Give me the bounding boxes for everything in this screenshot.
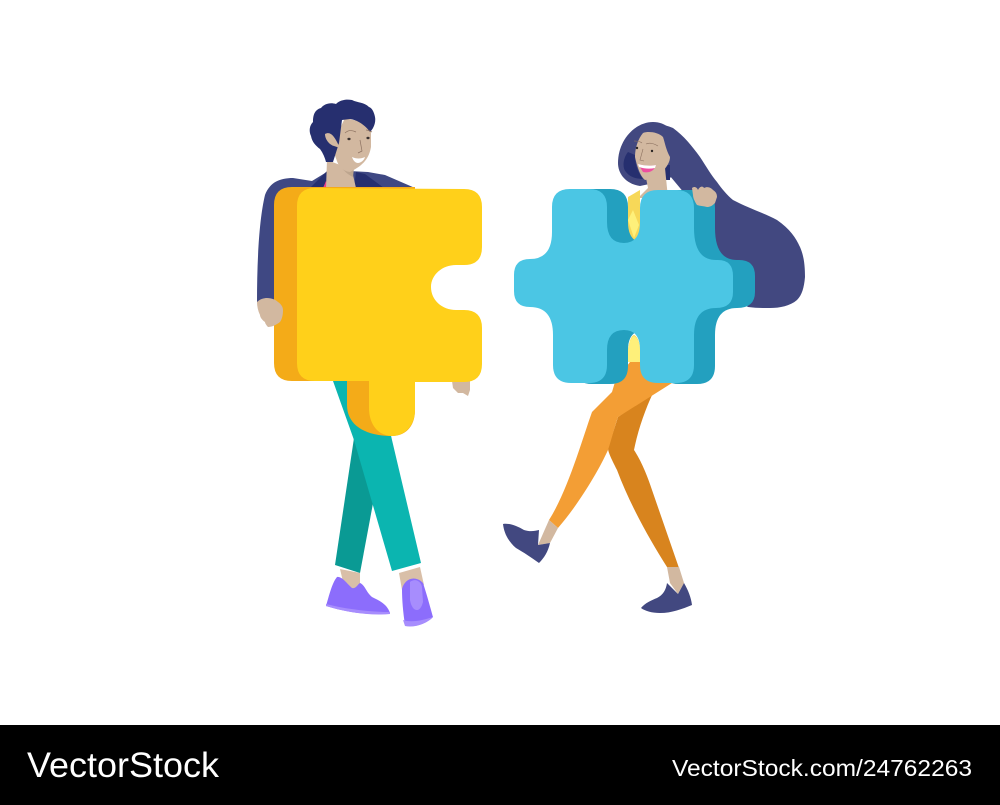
man right hand <box>452 381 470 396</box>
man front ankle <box>399 567 424 590</box>
figure: woman carrying blue puzzle piece <box>503 122 805 613</box>
woman long hair <box>655 124 805 308</box>
woman hair shadow <box>624 152 643 179</box>
man back ankle <box>340 569 360 590</box>
blue puzzle back face <box>574 189 755 384</box>
neck shadow <box>332 145 354 177</box>
woman blouse <box>628 190 640 362</box>
man back shoe <box>326 577 390 615</box>
hair shadow behind neck <box>664 165 670 180</box>
man ear <box>325 133 340 148</box>
woman back shoe <box>503 524 550 563</box>
woman hair front <box>618 122 678 186</box>
man shirt <box>323 181 329 188</box>
footer logo text: VectorStock <box>27 746 220 785</box>
man front shoe <box>402 579 433 627</box>
man hair <box>310 100 375 162</box>
figure: man carrying yellow puzzle piece <box>257 100 482 627</box>
woman eyes and nose <box>634 141 658 161</box>
man front leg <box>333 381 421 571</box>
man jacket <box>257 170 415 302</box>
woman neck <box>638 168 668 198</box>
man neck <box>326 160 356 188</box>
yellow puzzle front face <box>297 188 482 436</box>
woman back leg <box>608 393 679 568</box>
man back leg <box>335 438 380 573</box>
woman back ankle <box>538 520 558 545</box>
woman collar <box>665 180 672 192</box>
footer bar <box>0 725 1000 805</box>
man eyes and nose <box>345 130 372 153</box>
man left hand <box>257 298 283 327</box>
woman face <box>635 132 670 180</box>
blue puzzle front face <box>514 189 733 383</box>
woman front ankle <box>667 567 684 594</box>
footer image link text: VectorStock.com/24762263 <box>672 755 972 781</box>
woman hand on puzzle <box>692 187 717 207</box>
woman smile <box>638 164 656 172</box>
woman front leg <box>549 362 672 528</box>
man smile <box>352 157 365 163</box>
yellow puzzle back face <box>274 187 415 436</box>
blouse highlight <box>628 210 640 362</box>
jacket collar <box>310 171 384 188</box>
woman front shoe <box>641 583 692 613</box>
man face <box>332 118 371 172</box>
